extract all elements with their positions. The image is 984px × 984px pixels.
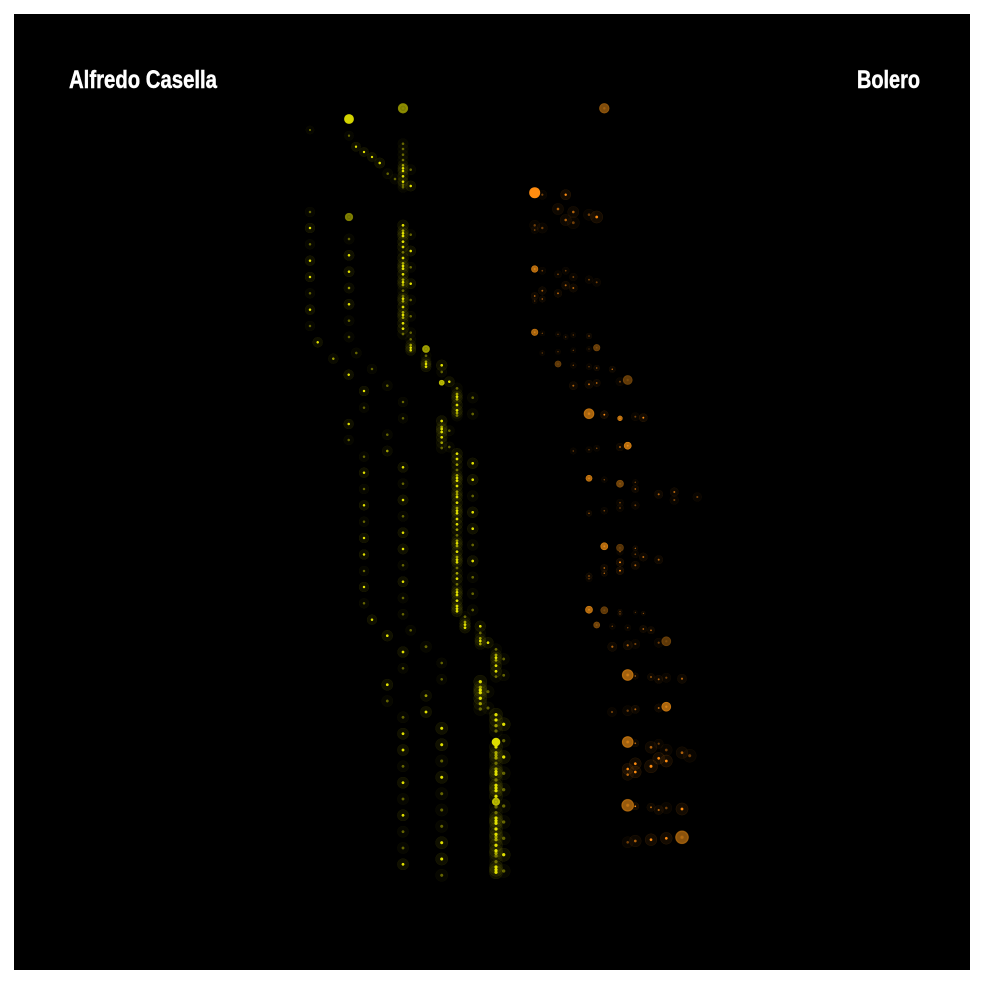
yellow note stream: Alfredo Casella	[305, 126, 511, 882]
title: piece: Bolero	[857, 66, 920, 94]
title: composer: Alfredo Casella	[69, 66, 218, 94]
orange large notes	[529, 103, 689, 844]
yellow large notes	[344, 103, 500, 806]
orange note stream: Bolero	[529, 189, 702, 848]
